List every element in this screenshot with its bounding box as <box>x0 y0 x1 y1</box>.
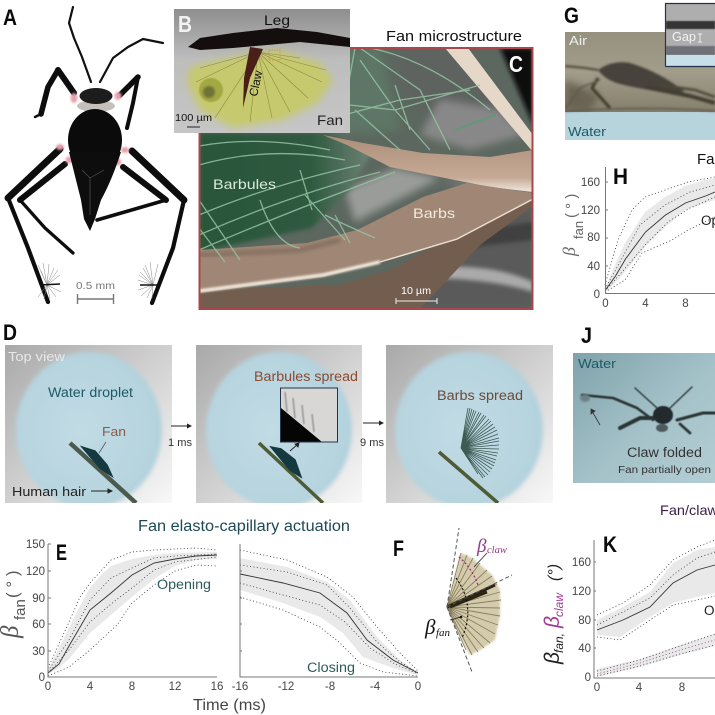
y axis title: fan, <box>552 633 566 653</box>
tick labels: 12 <box>169 681 181 693</box>
label barbules spread: Barbules spread <box>254 369 358 384</box>
tick labels: 80 <box>587 232 600 244</box>
band <box>240 558 418 675</box>
axes <box>48 544 217 677</box>
inset micrograph <box>280 388 338 442</box>
tick labels: 4 <box>642 298 649 310</box>
tick labels: -4 <box>370 681 381 693</box>
label leg: Leg <box>264 12 290 28</box>
arrow 9 ms <box>360 420 384 449</box>
label G: G <box>564 3 579 28</box>
tick labels: 40 <box>587 261 600 273</box>
label closing: Closing <box>307 660 355 675</box>
beta claw label: claw <box>487 545 507 556</box>
scale bar 10 µm <box>396 286 437 304</box>
y axis title: (°) <box>546 564 563 581</box>
arrow 1 ms: 1 ms <box>168 437 192 449</box>
inset gap <box>666 4 715 66</box>
claw band <box>597 634 715 677</box>
panel C: fan microstructure SEM <box>199 28 533 309</box>
label water: Water <box>578 356 617 371</box>
tick labels: 0 <box>594 682 600 694</box>
label opening fragment: O <box>704 603 715 618</box>
SEM image <box>199 48 533 309</box>
tick labels: 60 <box>32 619 45 631</box>
heading fan microstructure: Fan microstructure <box>386 28 522 45</box>
y axis title <box>0 570 29 639</box>
tick labels <box>26 539 223 693</box>
tick labels: 80 <box>578 615 591 627</box>
mean line <box>240 574 418 673</box>
dotted traces <box>605 177 715 292</box>
label F: F <box>393 536 404 561</box>
tick labels: -12 <box>278 681 294 693</box>
label fan partially open: Fan partially open <box>618 464 711 476</box>
label top view: Top view <box>8 350 66 364</box>
arrow 9 ms: 9 ms <box>360 437 384 449</box>
label barbs: Barbs <box>413 205 455 221</box>
tick labels: 0 <box>415 681 421 693</box>
red border <box>200 48 532 309</box>
barb lines <box>447 553 501 655</box>
barbules <box>199 48 495 262</box>
arrow <box>591 409 600 425</box>
gap bracket <box>698 34 702 42</box>
opened fan <box>461 408 499 478</box>
dotted traces <box>240 550 418 676</box>
panel B: claw and fan micrograph <box>174 9 350 133</box>
label fan: Fan <box>102 424 126 439</box>
label fan: Fan <box>317 112 343 128</box>
scale bar <box>76 280 115 304</box>
insect legs <box>8 70 184 303</box>
tick labels: 0 <box>594 289 600 301</box>
dotted traces <box>597 540 715 676</box>
arrow to hair <box>91 489 112 493</box>
y axis title: β <box>559 247 579 257</box>
tick labels: 4 <box>636 682 643 694</box>
label claw folded: Claw folded <box>627 445 702 460</box>
tick labels: 0 <box>602 298 609 310</box>
tick labels: 120 <box>572 586 591 598</box>
band <box>606 178 715 292</box>
tick labels: 0 <box>585 672 591 684</box>
label barbules: Barbules <box>213 176 276 192</box>
tick labels: 16 <box>211 681 223 693</box>
background <box>174 9 350 133</box>
y axis title <box>559 194 586 257</box>
label human hair: Human hair <box>12 484 87 499</box>
mean line <box>606 192 715 290</box>
label barbs spread: Barbs spread <box>437 388 523 403</box>
y axis title: ( ° ) <box>563 194 580 218</box>
axes <box>606 167 715 294</box>
label J: J <box>581 323 592 348</box>
orange box <box>269 50 280 60</box>
scale bar 10 µm: 10 µm <box>401 286 431 297</box>
image 1: water droplet <box>5 345 172 508</box>
chart K: fan and claw <box>541 502 715 694</box>
beta claw label: β <box>476 536 487 557</box>
leg <box>188 28 350 50</box>
image 2: barbules spread <box>196 345 362 508</box>
arrow 1 ms <box>168 424 192 449</box>
beta claw label <box>474 536 507 567</box>
tick labels: 160 <box>581 177 600 189</box>
dotted traces <box>48 548 217 676</box>
mean line fan <box>597 565 715 630</box>
y axis title <box>541 564 566 665</box>
fan right foot <box>138 262 158 298</box>
tick labels: 120 <box>581 205 600 217</box>
tick labels: 150 <box>26 539 45 551</box>
y axis title: fan <box>12 599 29 620</box>
y axis title: β <box>541 616 564 629</box>
chart E: closing <box>232 544 421 693</box>
leg <box>447 585 495 607</box>
label claw: Claw <box>246 69 265 98</box>
mean line <box>48 555 217 673</box>
tick labels: -16 <box>232 681 248 693</box>
scale bar 100 µm: 100 µm <box>175 112 212 124</box>
y axis title: fan <box>571 221 586 239</box>
tick labels: 30 <box>32 646 45 658</box>
beta fan label: β <box>424 615 436 639</box>
tick labels: 120 <box>26 566 45 578</box>
chart H: fan opening <box>559 151 715 310</box>
tick labels: 4 <box>87 681 94 693</box>
dashed reference lines <box>447 528 512 672</box>
scale bar 100 µm <box>176 114 212 128</box>
label A: A <box>3 5 17 30</box>
chart E: opening <box>0 539 223 693</box>
tick labels: 90 <box>32 593 45 605</box>
tick labels: -8 <box>325 681 335 693</box>
label H: H <box>613 164 628 189</box>
fan band <box>597 547 715 637</box>
tick labels <box>232 681 421 693</box>
heading fragment: Fan/claw <box>660 502 715 518</box>
tick labels <box>572 557 685 694</box>
insect joints pink <box>56 92 129 166</box>
claw <box>243 47 263 108</box>
y axis title: ( ° ) <box>3 570 22 598</box>
insect in water <box>582 387 715 433</box>
tick labels: 0 <box>45 681 51 693</box>
fan <box>187 50 333 128</box>
tick labels: 8 <box>679 682 685 694</box>
label C: C <box>509 51 523 77</box>
tick labels <box>581 177 689 310</box>
tick labels: 0 <box>39 672 45 684</box>
axes <box>594 540 715 678</box>
image 3: barbs spread <box>386 345 553 508</box>
tick labels: 160 <box>572 557 591 569</box>
tick labels: 8 <box>129 681 135 693</box>
label water: Water <box>568 124 607 139</box>
label water droplet: Water droplet <box>48 385 133 400</box>
band <box>48 552 217 674</box>
arrow to fan <box>99 442 106 453</box>
label opening: Opening <box>157 577 211 592</box>
angle arcs <box>456 578 468 638</box>
insect antennae <box>69 7 163 82</box>
label K: K <box>603 532 617 557</box>
heading: elasto-capillary actuation: Fan elasto-capillary actuation <box>138 518 350 535</box>
label E: E <box>56 540 67 565</box>
axes <box>240 544 418 677</box>
label air: Air <box>569 34 587 48</box>
y axis title: claw <box>552 592 566 617</box>
droplet <box>199 78 223 102</box>
scale bar: 0.5 mm <box>76 280 115 292</box>
fan sector <box>447 553 500 655</box>
insect body <box>68 88 122 231</box>
tick labels: 8 <box>682 298 689 310</box>
label gap: Gap <box>672 30 696 44</box>
panel D: droplet sequence <box>3 320 553 508</box>
fan left foot <box>38 263 61 299</box>
side view photo <box>565 32 715 140</box>
y axis title: β <box>541 652 564 665</box>
panel A: insect <box>3 5 184 304</box>
beta fan label <box>424 615 462 639</box>
label D: D <box>3 320 17 345</box>
underwater image <box>573 353 715 483</box>
beta fan label: fan <box>436 627 451 639</box>
arrow to inset <box>290 443 299 451</box>
x axis title: Time (ms) <box>193 697 266 714</box>
panel G: water strider on surface <box>564 3 715 140</box>
panel J: underwater photo <box>573 323 715 483</box>
label B: B <box>178 11 192 37</box>
tick labels: 40 <box>578 643 591 655</box>
panel F: fan angle diagram <box>393 528 512 672</box>
